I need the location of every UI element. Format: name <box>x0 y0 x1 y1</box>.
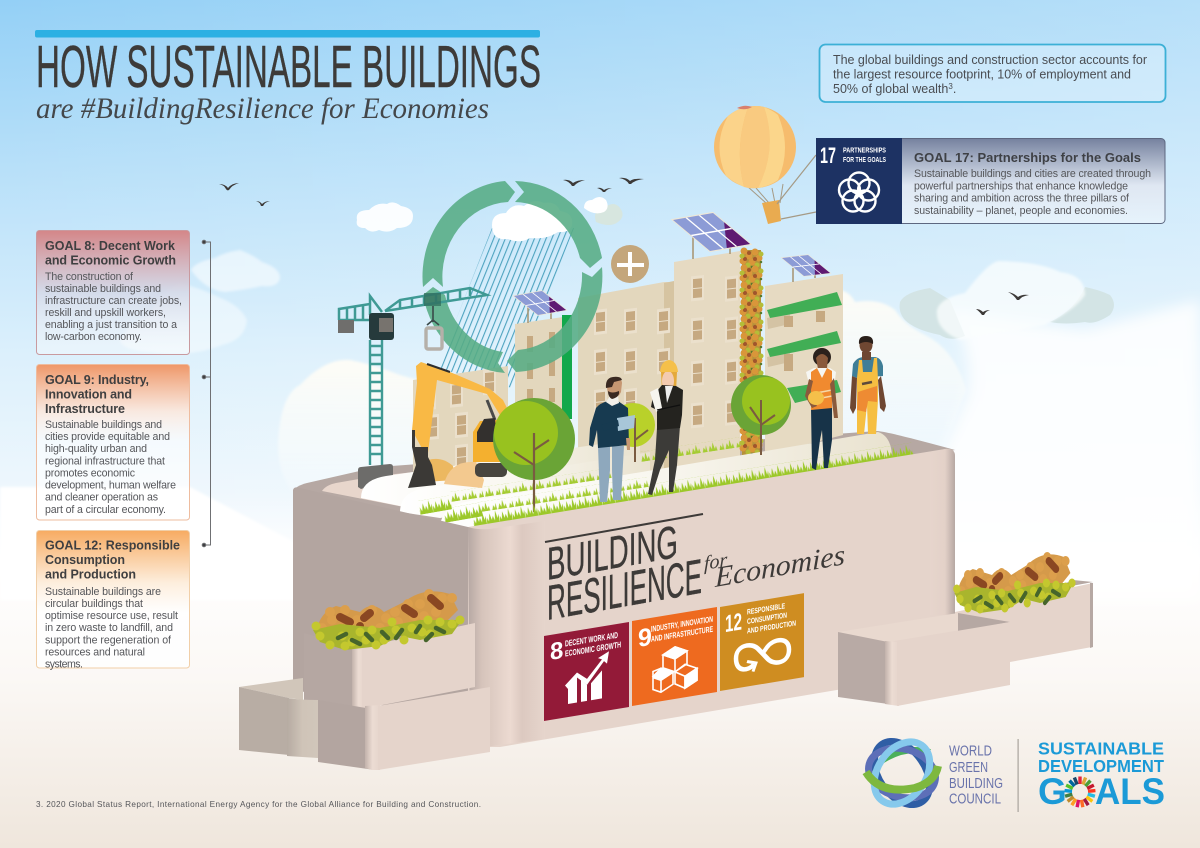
SDG tile 12: 12 <box>725 609 742 638</box>
large cream cloud right <box>840 290 966 445</box>
panel: goal 17: GOAL 17: Partnerships for the Goals <box>914 150 1141 165</box>
main planter <box>293 449 955 749</box>
pale green cloud far right <box>1050 287 1114 324</box>
panel: goal 12 <box>36 530 190 670</box>
right flowers <box>954 554 1074 613</box>
headline on planter: for <box>704 549 727 575</box>
rain hatching <box>437 228 574 388</box>
building C <box>578 281 674 480</box>
footnote: 3. 2020 Global Status Report, International Energy Agency for the Global Alliance for Building and Construction. <box>36 800 481 809</box>
panel: goal 8: reskill and upskill workers, <box>45 307 166 319</box>
SDG tile 8: 8 <box>550 637 563 666</box>
icon: stacked cubes <box>653 643 697 694</box>
right back planter <box>955 580 1093 672</box>
panel: goal 12: resources and natural <box>45 646 145 658</box>
SDG tile 12: AND PRODUCTION <box>747 619 796 636</box>
hot air balloon <box>714 106 816 224</box>
far left planter <box>239 678 318 758</box>
crane hook and load <box>424 293 442 349</box>
World Green Building Council logo <box>863 731 1003 815</box>
panel: goal 9: and cleaner operation as <box>45 492 158 504</box>
panel: goal 8: sustainable buildings and <box>45 283 161 295</box>
panel: goal 9: Sustainable buildings and <box>45 419 162 431</box>
tree: behind people <box>611 403 655 462</box>
SDG 17 tile <box>816 138 902 224</box>
panel: goal 17 <box>816 138 1165 224</box>
panel: goal 8: The construction of <box>45 271 133 283</box>
crane cab <box>369 313 394 340</box>
person: woman with helmet and vest <box>805 348 838 470</box>
icon: globe rings <box>863 731 941 815</box>
SDG 17 tile: 17 <box>820 143 836 168</box>
panel: goal 9: GOAL 9: Industry, <box>45 373 149 387</box>
birds <box>219 178 1029 315</box>
plus icon <box>611 245 649 283</box>
panel: goal 9: cities provide equitable and <box>45 431 170 443</box>
person: worker in overalls <box>850 336 886 434</box>
planter right corner <box>930 449 955 615</box>
green wall on building B <box>562 315 572 419</box>
panel: goal 8: GOAL 8: Decent Work <box>45 239 175 253</box>
panel: goal 8: infrastructure can create jobs, <box>45 295 182 307</box>
translucent cloud lower left <box>120 283 247 354</box>
SDG tile 12 <box>720 593 804 691</box>
Sustainable Development Goals logo: ALS <box>1095 771 1165 812</box>
icon: growth chart <box>565 651 609 705</box>
crane jib <box>339 288 487 320</box>
World Green Building Council logo: BUILDING <box>949 775 1003 792</box>
Sustainable Development Goals logo: SUSTAINABLE <box>1038 738 1164 758</box>
SDG tile 8: DECENT WORK AND <box>565 630 618 649</box>
panel: goal 9: promotes economic <box>45 468 136 480</box>
planter left face <box>293 487 468 720</box>
recycling ring arrows <box>422 181 602 373</box>
tower crane <box>338 288 487 489</box>
statistic callout: The global buildings and construction sector accounts for <box>833 53 1147 67</box>
small clouds near ring <box>584 197 623 225</box>
left flower planter <box>304 623 475 709</box>
panel: goal 17: Sustainable buildings and cities are created through <box>914 168 1151 180</box>
panel: goal 8: enabling a just transition to a <box>45 319 177 331</box>
SDG 17 tile: FOR THE GOALS <box>843 155 886 164</box>
small white cloud <box>357 202 413 232</box>
panel: goal 12: circular buildings that <box>45 598 143 610</box>
crane base <box>358 464 393 489</box>
panel: goal 9: part of a circular economy. <box>45 504 166 516</box>
panel: goal 12: in zero waste to landfill, and <box>45 622 173 634</box>
panel: goal 12: Sustainable buildings are <box>45 586 161 598</box>
panel: goal 9: Infrastructure <box>45 402 125 416</box>
planter front grass <box>472 443 914 527</box>
title accent bar <box>35 30 540 38</box>
panel: goal 8: and Economic Growth <box>45 254 176 268</box>
statistic callout: 50% of global wealth <box>833 82 948 96</box>
large cream cloud left <box>278 360 425 500</box>
panel: goal 17: sustainability – planet, people and economies. <box>914 205 1128 217</box>
translucent cloud upper left <box>191 250 280 292</box>
panel: goal 12: support the regeneration of <box>45 634 171 646</box>
planter top surface <box>293 431 955 530</box>
panel: goal 8: low-carbon economy. <box>45 331 142 343</box>
Sustainable Development Goals logo: DEVELOPMENT <box>1038 756 1164 776</box>
subtitle: are #BuildingResilience for Economies <box>36 92 489 125</box>
crane mast ladder <box>370 340 382 465</box>
panel: goal 8 <box>36 230 190 354</box>
tree: right <box>731 375 791 455</box>
person: woman in hard hat <box>648 360 683 495</box>
logo divider <box>1018 739 1019 812</box>
SDG tile 9: AND INFRASTRUCTURE <box>651 625 713 644</box>
SDG tile 8 <box>544 622 629 721</box>
statistic callout: the largest resource footprint, 10% of employment and <box>833 68 1131 82</box>
World Green Building Council logo: WORLD <box>949 742 992 760</box>
Sustainable Development Goals logo: G <box>1038 771 1067 812</box>
buildings <box>413 250 843 480</box>
building B <box>515 316 570 470</box>
World Green Building Council logo: COUNCIL <box>949 790 1001 808</box>
green awnings <box>767 292 842 403</box>
main title <box>35 30 541 100</box>
panel: goal 9: Innovation and <box>45 388 132 402</box>
front right planter <box>838 613 1010 706</box>
building A <box>413 366 508 480</box>
SDG tile 12: CONSUMPTION <box>747 610 787 626</box>
solar panels <box>512 212 831 323</box>
excavator <box>408 362 507 488</box>
panel: goal 12: and Production <box>45 568 136 582</box>
headline on planter: RESILIENCE <box>547 549 702 631</box>
bracket connector <box>202 240 210 547</box>
panel: goal 9: development, human welfare <box>45 480 176 492</box>
panel: goal 12: GOAL 12: Responsible <box>45 538 180 552</box>
living wall <box>742 250 761 457</box>
panel: goal 9 <box>36 364 190 520</box>
headline on planter: BUILDING <box>547 515 678 590</box>
SDG tile 8: ECONOMIC GROWTH <box>565 639 621 659</box>
building E <box>765 274 843 455</box>
headline on planter: Economies <box>714 539 845 594</box>
white cloud right <box>937 261 1085 340</box>
icon: SDG colour wheel <box>1064 776 1096 808</box>
icon: infinity loop <box>736 639 789 674</box>
World Green Building Council logo: GREEN <box>949 759 988 776</box>
planter left corner <box>468 521 545 749</box>
SDG tile 9: 9 <box>638 623 652 653</box>
crane counterweight <box>338 320 354 333</box>
white haze lower left <box>0 487 300 600</box>
lower left planter <box>318 687 490 770</box>
panel: goal 12: systems. <box>45 658 83 670</box>
tree: left <box>493 398 575 512</box>
panel: goal 12: optimise resource use, result <box>45 610 178 622</box>
grass tufts <box>418 495 483 523</box>
SDG tile 9: INDUSTRY, INNOVATION <box>651 615 713 634</box>
SDG tile 12: RESPONSIBLE <box>747 601 785 617</box>
SDG 17 tile: PARTNERSHIPS <box>843 146 886 154</box>
clouds <box>0 202 1200 600</box>
grass mounds <box>361 432 892 528</box>
person: man with tablet <box>589 377 635 502</box>
title text: HOW SUSTAINABLE BUILDINGS <box>36 34 541 100</box>
panel: goal 17: powerful partnerships that enhance knowledge <box>914 180 1128 192</box>
icon: interlocking rings <box>839 172 879 212</box>
panel: goal 12: Consumption <box>45 553 125 567</box>
cloud above recycling ring <box>492 201 572 241</box>
Sustainable Development Goals logo <box>1038 738 1165 812</box>
building D <box>674 251 740 470</box>
panel: goal 9: high-quality urban and <box>45 443 147 455</box>
planter front face <box>468 449 955 747</box>
panel: goal 9: regional infrastructure that <box>45 455 165 467</box>
pale green cloud <box>900 288 965 339</box>
panel: goal 17: sharing and ambition across the three pillars of <box>914 192 1129 204</box>
statistic callout: 3 <box>948 82 953 91</box>
statistic callout <box>820 44 1166 102</box>
white haze right <box>930 300 1200 600</box>
left flowers <box>313 591 462 650</box>
SDG tile 9 <box>632 607 717 706</box>
statistic callout: . <box>953 82 956 96</box>
